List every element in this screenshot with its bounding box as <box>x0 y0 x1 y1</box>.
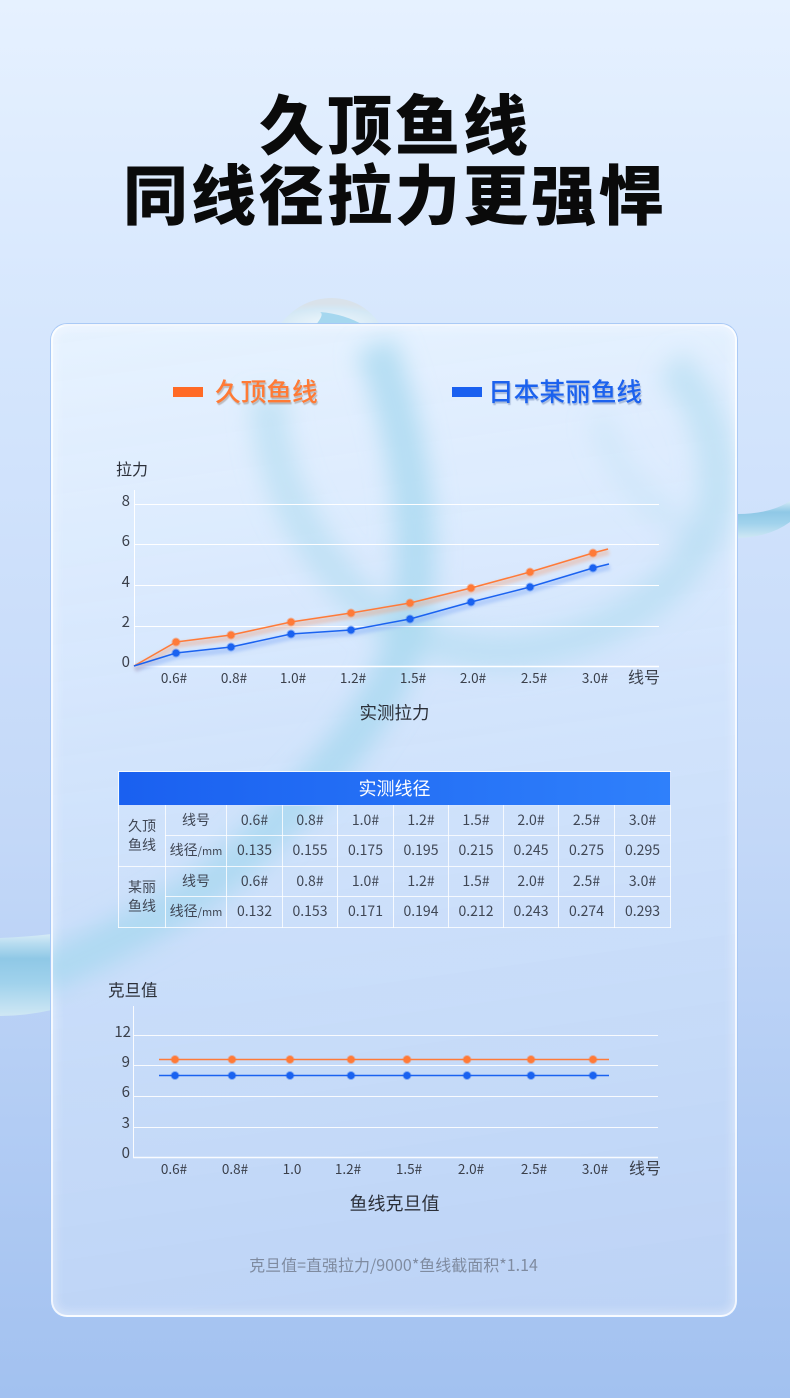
table: 实测线径: 0.195 <box>404 840 438 860</box>
table: 实测线径: 3.0# <box>629 871 656 891</box>
chart: 实测拉力 line chart: 4 <box>122 571 130 592</box>
table: 实测线径: 3.0# <box>629 810 656 830</box>
chart: 鱼线克旦值 line chart: 6 <box>122 1081 130 1102</box>
orange series <box>134 549 609 669</box>
table: 实测线径: 1.2# <box>407 810 435 830</box>
table: 实测线径: 0.274 <box>569 901 604 921</box>
chart: 鱼线克旦值 line chart: 9 <box>122 1051 130 1072</box>
legend: 久顶鱼线: 久顶鱼线 <box>215 372 318 409</box>
table: 实测线径: 0.8# <box>296 871 324 891</box>
chart: 实测拉力 line chart: 2.0# <box>460 667 487 687</box>
table: 实测线径: 2.0# <box>517 871 545 891</box>
table: 实测线径: 0.155 <box>292 840 327 860</box>
chart: 鱼线克旦值 line chart: 线号 <box>629 1155 661 1179</box>
chart: 实测拉力 line chart: 0.8# <box>221 667 248 687</box>
chart: 鱼线克旦值 line chart: 3.0# <box>582 1158 609 1178</box>
table: 实测线径: 鱼线 <box>128 896 156 916</box>
chart: 鱼线克旦值 line chart: 0 <box>122 1142 130 1163</box>
chart: 实测拉力 line chart: 1.2# <box>340 667 367 687</box>
glass card panel <box>51 324 737 1317</box>
orange series <box>159 1056 609 1063</box>
table: 实测线径: 2.5# <box>573 810 600 830</box>
table: 实测线径: 0.293 <box>625 901 660 921</box>
title: 久顶鱼线 <box>259 74 531 168</box>
table: 实测线径: 0.6# <box>241 871 268 891</box>
chart: 实测拉力 line chart: 1.5# <box>400 667 427 687</box>
legend: 日本某丽鱼线: 日本某丽鱼线 <box>488 372 642 409</box>
chart: 鱼线克旦值 line chart: 1.0 <box>283 1158 301 1178</box>
table: 实测线径: 0.194 <box>404 901 438 921</box>
chart: 实测拉力 line chart: 拉力 <box>116 456 148 480</box>
table: 实测线径: 1.2# <box>407 871 435 891</box>
table: 实测线径: 2.5# <box>573 871 600 891</box>
chart: 实测拉力 line chart: 实测拉力 <box>360 700 430 725</box>
chart: 实测拉力 line chart: 3.0# <box>582 667 609 687</box>
table: 实测线径: 1.0# <box>352 810 379 830</box>
chart: 鱼线克旦值 line chart: 2.0# <box>458 1158 485 1178</box>
chart: 实测拉力 line chart <box>116 456 660 725</box>
chart: 鱼线克旦值 line chart: 1.5# <box>396 1158 423 1178</box>
table: 实测线径: 0.245 <box>514 840 548 860</box>
table: 实测线径: 0.295 <box>625 840 660 860</box>
chart: 实测拉力 line chart: 6 <box>122 530 130 551</box>
table: 实测线径: 0.212 <box>458 901 493 921</box>
chart: 鱼线克旦值 line chart <box>108 977 661 1216</box>
chart: 实测拉力 line chart: 线号 <box>628 664 660 688</box>
chart: 实测拉力 line chart: 2.5# <box>521 667 548 687</box>
table: 实测线径 <box>118 771 671 928</box>
table: 实测线径: 0.153 <box>292 901 327 921</box>
table: 实测线径: 2.0# <box>517 810 545 830</box>
chart: 鱼线克旦值 line chart: 2.5# <box>521 1158 548 1178</box>
table: 实测线径: 1.5# <box>462 810 490 830</box>
table: 实测线径: 1.5# <box>462 871 490 891</box>
table: 实测线径: 0.8# <box>296 810 324 830</box>
chart: 实测拉力 line chart: 8 <box>122 490 130 511</box>
chart: 鱼线克旦值 line chart: 鱼线克旦值 <box>350 1190 440 1216</box>
chart: 鱼线克旦值 line chart: 0.6# <box>161 1158 188 1178</box>
title <box>123 74 667 238</box>
table: 实测线径: 0.135 <box>237 840 272 860</box>
table: 实测线径: 0.275 <box>569 840 604 860</box>
table: 实测线径: 0.132 <box>237 901 272 921</box>
chart: 实测拉力 line chart: 2 <box>122 611 130 632</box>
table: 实测线径: 0.215 <box>458 840 493 860</box>
table: 实测线径: 线径/mm <box>170 840 222 860</box>
chart: 鱼线克旦值 line chart: 12 <box>114 1021 131 1042</box>
chart: 实测拉力 line chart: 1.0# <box>280 667 307 687</box>
footnote formula: 克旦值=直强拉力/9000*鱼线截面积*1.14 <box>249 1252 538 1276</box>
table: 实测线径: 线号 <box>182 871 210 891</box>
chart: 鱼线克旦值 line chart: 1.2# <box>335 1158 362 1178</box>
table: 实测线径: 线号 <box>182 810 210 830</box>
title: 同线径拉力更强悍 <box>123 144 667 238</box>
table: 实测线径: 1.0# <box>352 871 379 891</box>
table: 实测线径: 实测线径 <box>359 775 431 801</box>
chart: 鱼线克旦值 line chart: 3 <box>122 1112 130 1133</box>
table: 实测线径: 0.6# <box>241 810 268 830</box>
table: 实测线径: 0.243 <box>514 901 548 921</box>
table: 实测线径: 某丽 <box>128 877 156 897</box>
chart: 鱼线克旦值 line chart: 克旦值 <box>108 977 158 1001</box>
chart: 鱼线克旦值 line chart: 0.8# <box>222 1158 249 1178</box>
blurred ribbon behind glass <box>53 332 735 996</box>
chart: 实测拉力 line chart: 0 <box>122 651 130 672</box>
table: 实测线径: 鱼线 <box>128 835 156 855</box>
blue series <box>134 564 610 669</box>
blue series <box>159 1072 609 1079</box>
table: 实测线径: 0.171 <box>348 901 383 921</box>
chart: 实测拉力 line chart: 0.6# <box>161 667 188 687</box>
table: 实测线径: 久顶 <box>128 816 156 836</box>
table: 实测线径: 线径/mm <box>170 901 222 921</box>
table: 实测线径: 0.175 <box>348 840 383 860</box>
